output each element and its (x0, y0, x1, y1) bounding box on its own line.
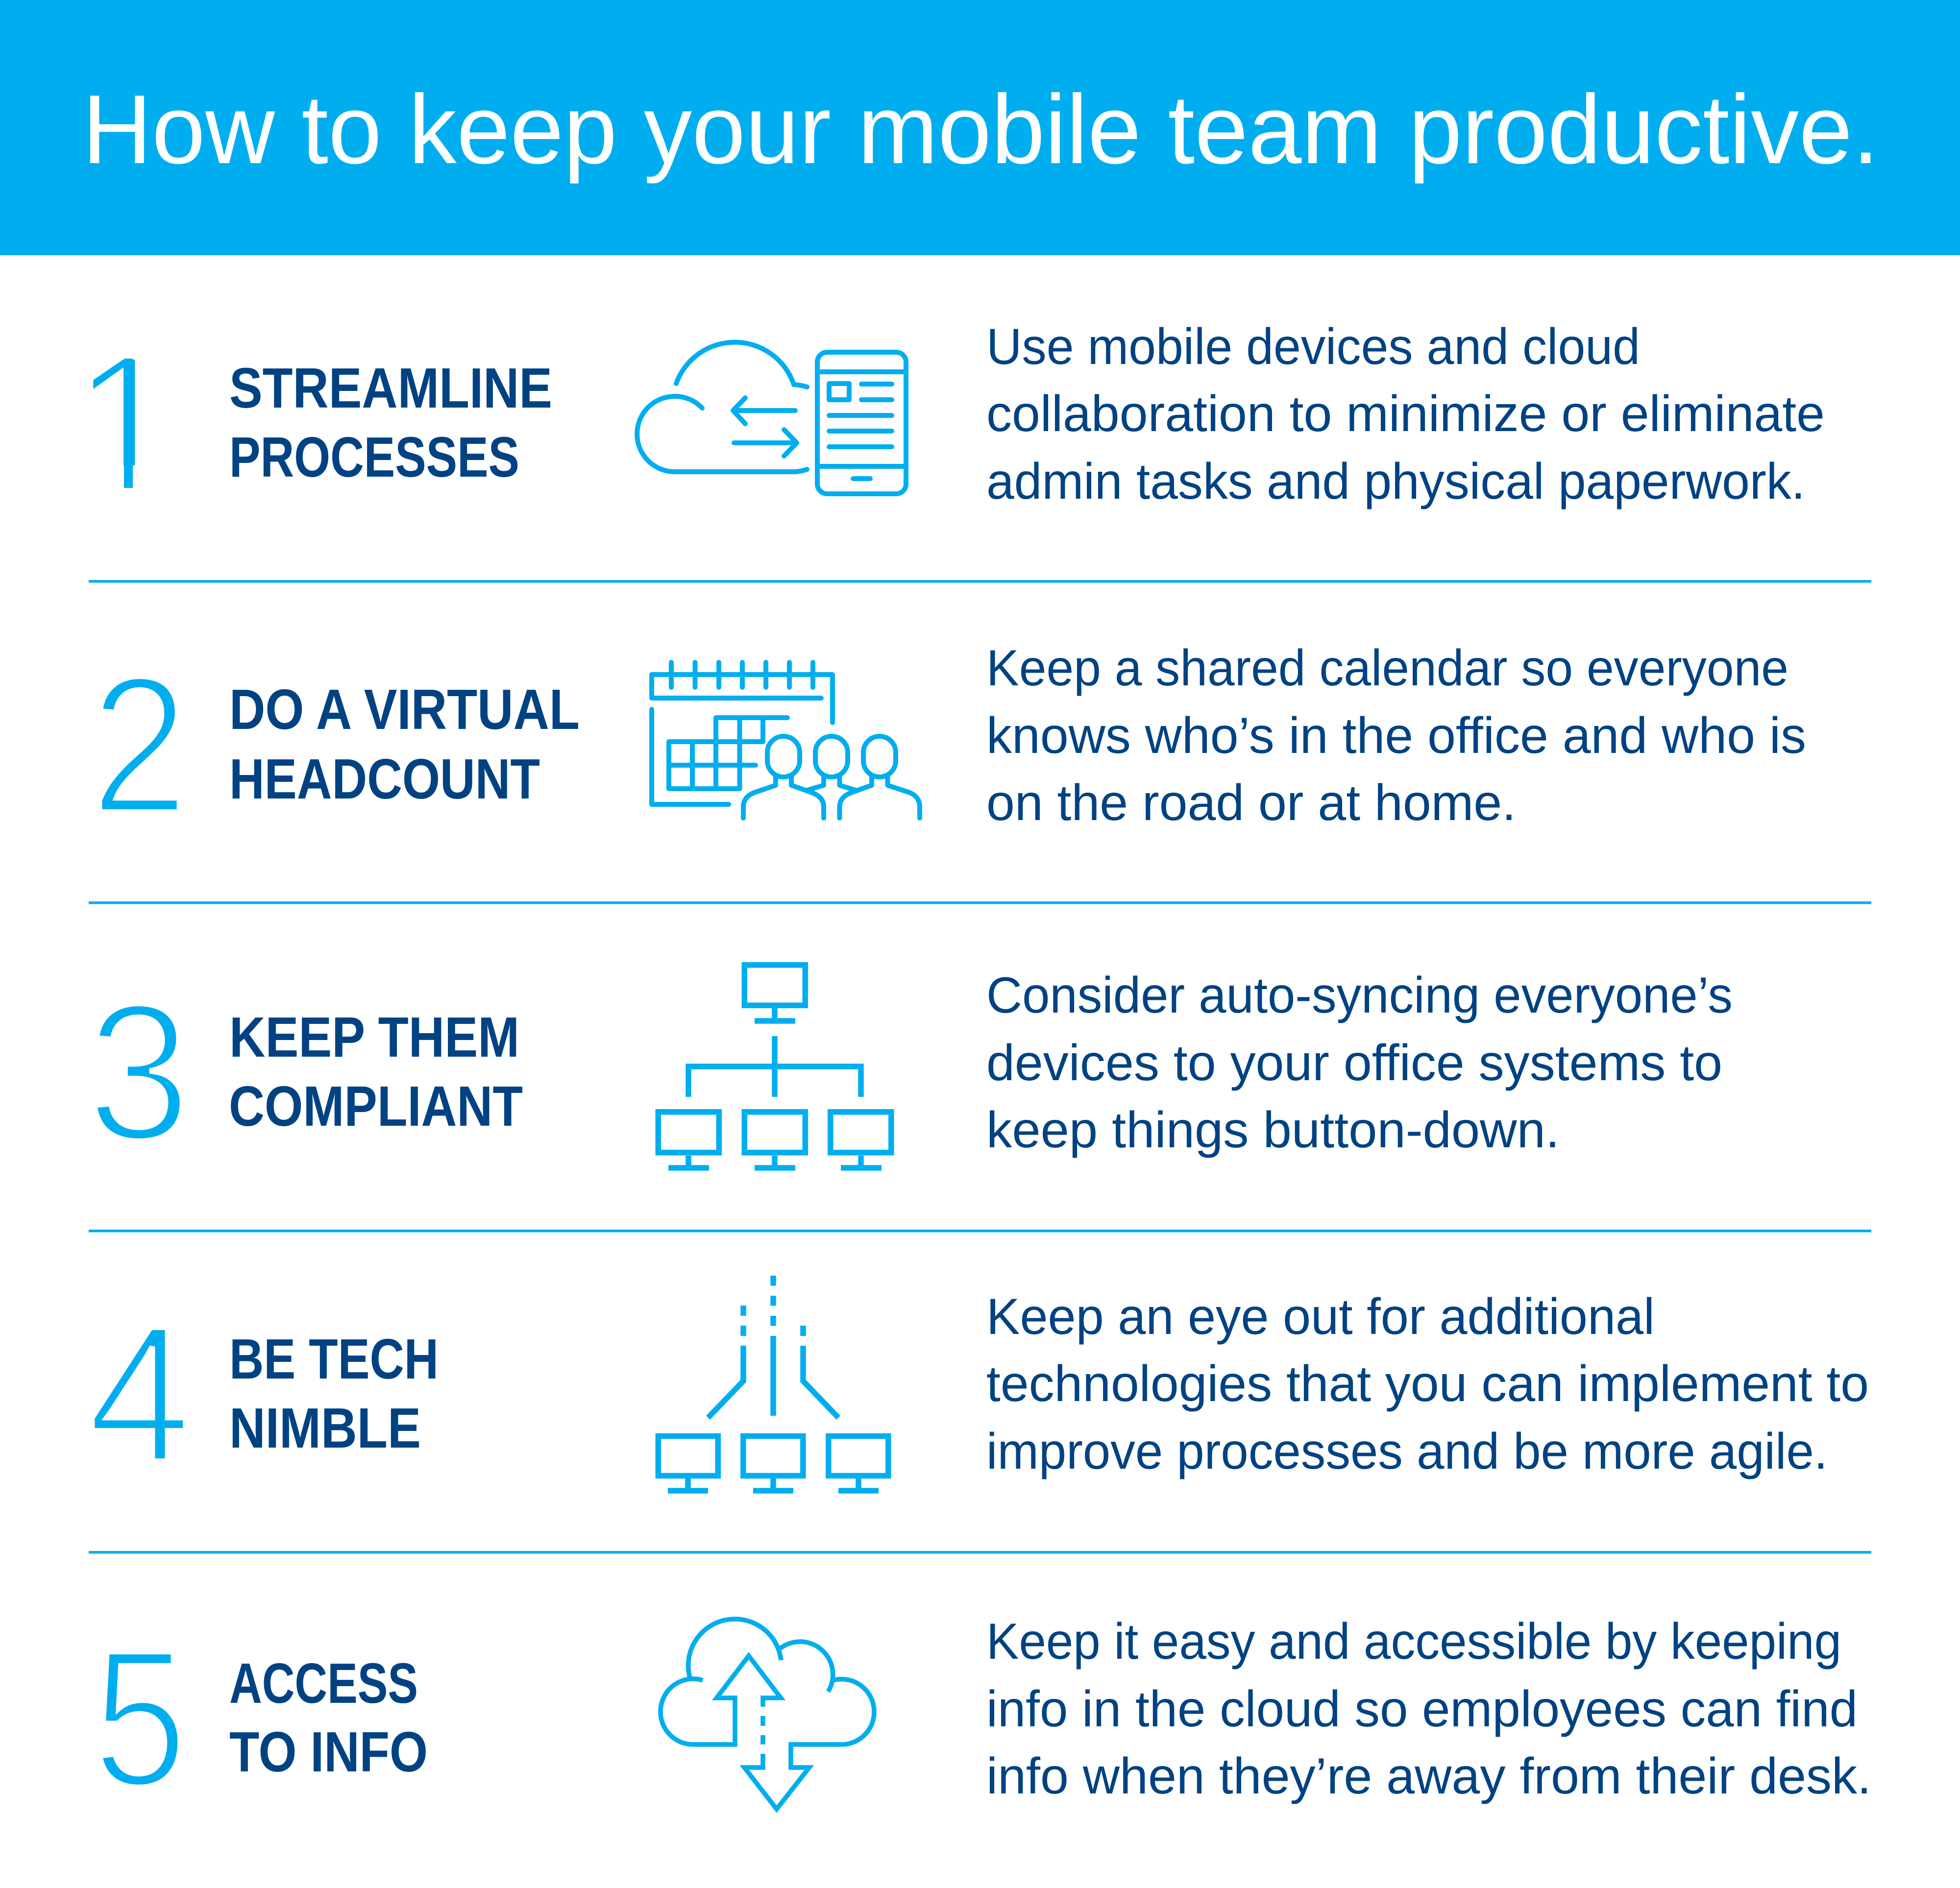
panel: row 2 virtual headcount (91, 636, 1806, 854)
heading: PROCESSES (229, 425, 519, 489)
heading: DO A VIRTUAL (229, 678, 580, 741)
number 3: 3 (87, 964, 191, 1181)
heading: HEADCOUNT (229, 747, 540, 811)
number 4: 4 (88, 1285, 191, 1503)
description: Use mobile devices and cloud (986, 318, 1640, 375)
panel: row 1 streamline processes (59, 315, 1825, 533)
description: keep things button-down. (986, 1102, 1560, 1159)
heading: NIMBLE (229, 1396, 421, 1460)
description: info when they’re away from their desk. (986, 1748, 1871, 1805)
description: improve processes and be more agile. (986, 1423, 1828, 1480)
description: info in the cloud so employees can find (986, 1681, 1858, 1738)
description: Keep an eye out for additional (986, 1288, 1655, 1345)
heading: COMPLIANT (229, 1074, 523, 1138)
description: Consider auto-syncing everyone’s (986, 967, 1733, 1024)
icon: cloud and tablet (637, 342, 906, 494)
icon: calendar and people (652, 662, 920, 818)
description: admin tasks and physical paperwork. (986, 453, 1805, 510)
heading: ACCESS (229, 1651, 418, 1715)
description: knows who’s in the office and who is (986, 707, 1806, 764)
description: on the road or at home. (986, 775, 1516, 831)
description: Keep a shared calendar so everyone (986, 640, 1788, 697)
icon: cloud with up and down arrows (661, 1619, 874, 1809)
description: technologies that you can implement to (986, 1355, 1869, 1412)
heading: TO INFO (229, 1720, 428, 1784)
number 1: 1 (72, 315, 180, 533)
header band (0, 0, 1960, 255)
panel: row 5 access to info (93, 1610, 1871, 1827)
description: devices to your office systems to (986, 1035, 1722, 1091)
heading: BE TECH (229, 1327, 439, 1391)
title: How to keep your mobile team productive. (82, 75, 1879, 184)
panel: row 3 keep them compliant (87, 964, 1733, 1181)
number 5: 5 (93, 1610, 187, 1827)
number 2: 2 (91, 636, 188, 854)
icon: network hierarchy (658, 965, 891, 1168)
heading: STREAMLINE (229, 356, 552, 420)
icon: merging lines to monitors (658, 1276, 888, 1491)
heading: KEEP THEM (229, 1005, 519, 1069)
description: collaboration to minimize or eliminate (986, 386, 1825, 442)
panel: row 4 be tech nimble (88, 1276, 1869, 1503)
description: Keep it easy and accessible by keeping (986, 1613, 1841, 1670)
